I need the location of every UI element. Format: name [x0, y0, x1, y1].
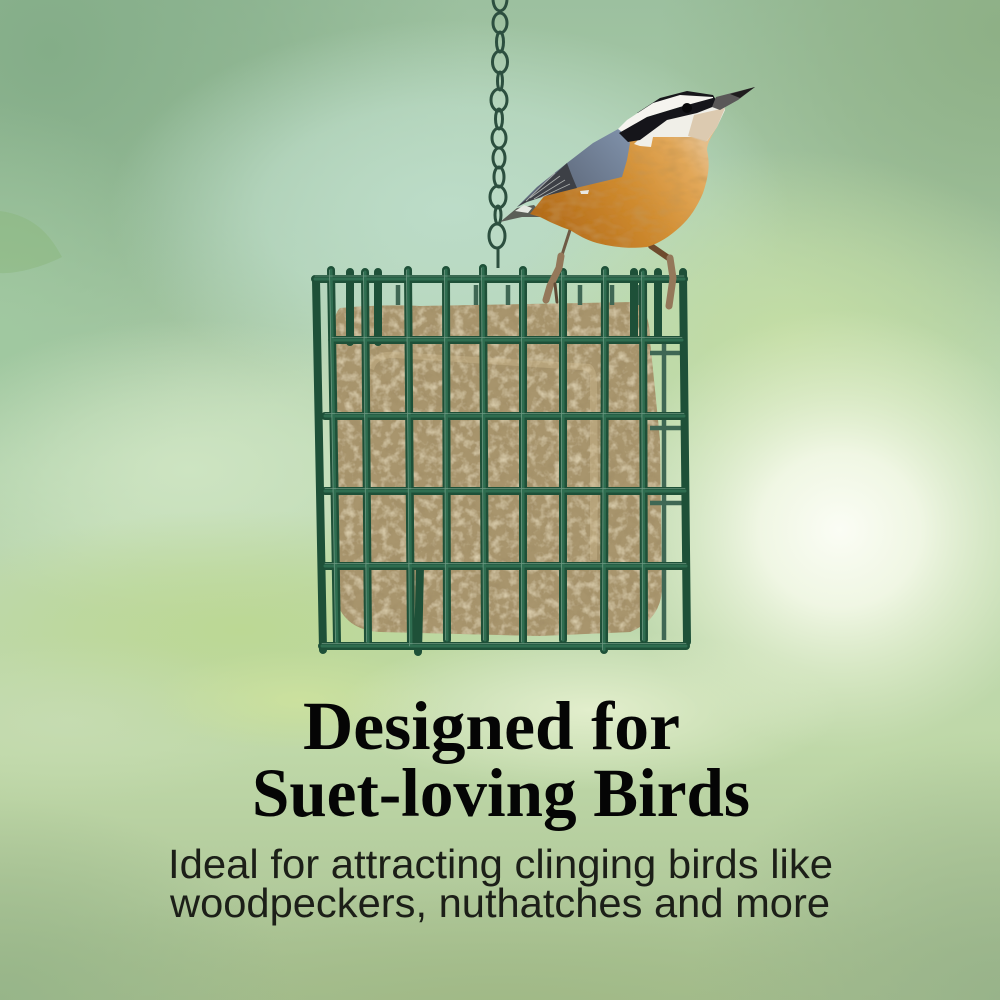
suet block: [332, 302, 662, 636]
bird: red-breasted nuthatch: [500, 87, 755, 306]
legs and feet: [546, 230, 673, 306]
heading line 2: Suet-loving Birds: [252, 755, 750, 831]
orange belly: [530, 125, 717, 248]
beak: [712, 87, 755, 110]
white tertial spot: [580, 190, 589, 194]
rear cage posts: [398, 285, 682, 640]
pressed rim on suet: [368, 352, 598, 560]
cage bars: [315, 268, 687, 652]
black crown: [637, 91, 716, 113]
heading: [252, 688, 750, 831]
subheading line 2: woodpeckers, nuthatches and more: [169, 880, 830, 926]
subheading: [168, 841, 833, 926]
white cheek and throat: [634, 104, 725, 147]
folded wing feathers: [517, 163, 577, 207]
white eyebrow stripe: [618, 95, 713, 132]
heading line 1: Designed for: [303, 688, 680, 764]
slate back: [517, 128, 630, 207]
subheading line 1: Ideal for attracting clinging birds like: [168, 841, 833, 887]
blurred leaf at left edge: [0, 211, 62, 273]
buff throat shading: [688, 108, 725, 142]
black eye stripe: [619, 98, 724, 142]
suet cake: [332, 302, 662, 636]
eye: [682, 103, 692, 113]
tail: [500, 205, 545, 222]
hanging chain: [489, 0, 508, 268]
wire feeder cage: [315, 268, 687, 652]
